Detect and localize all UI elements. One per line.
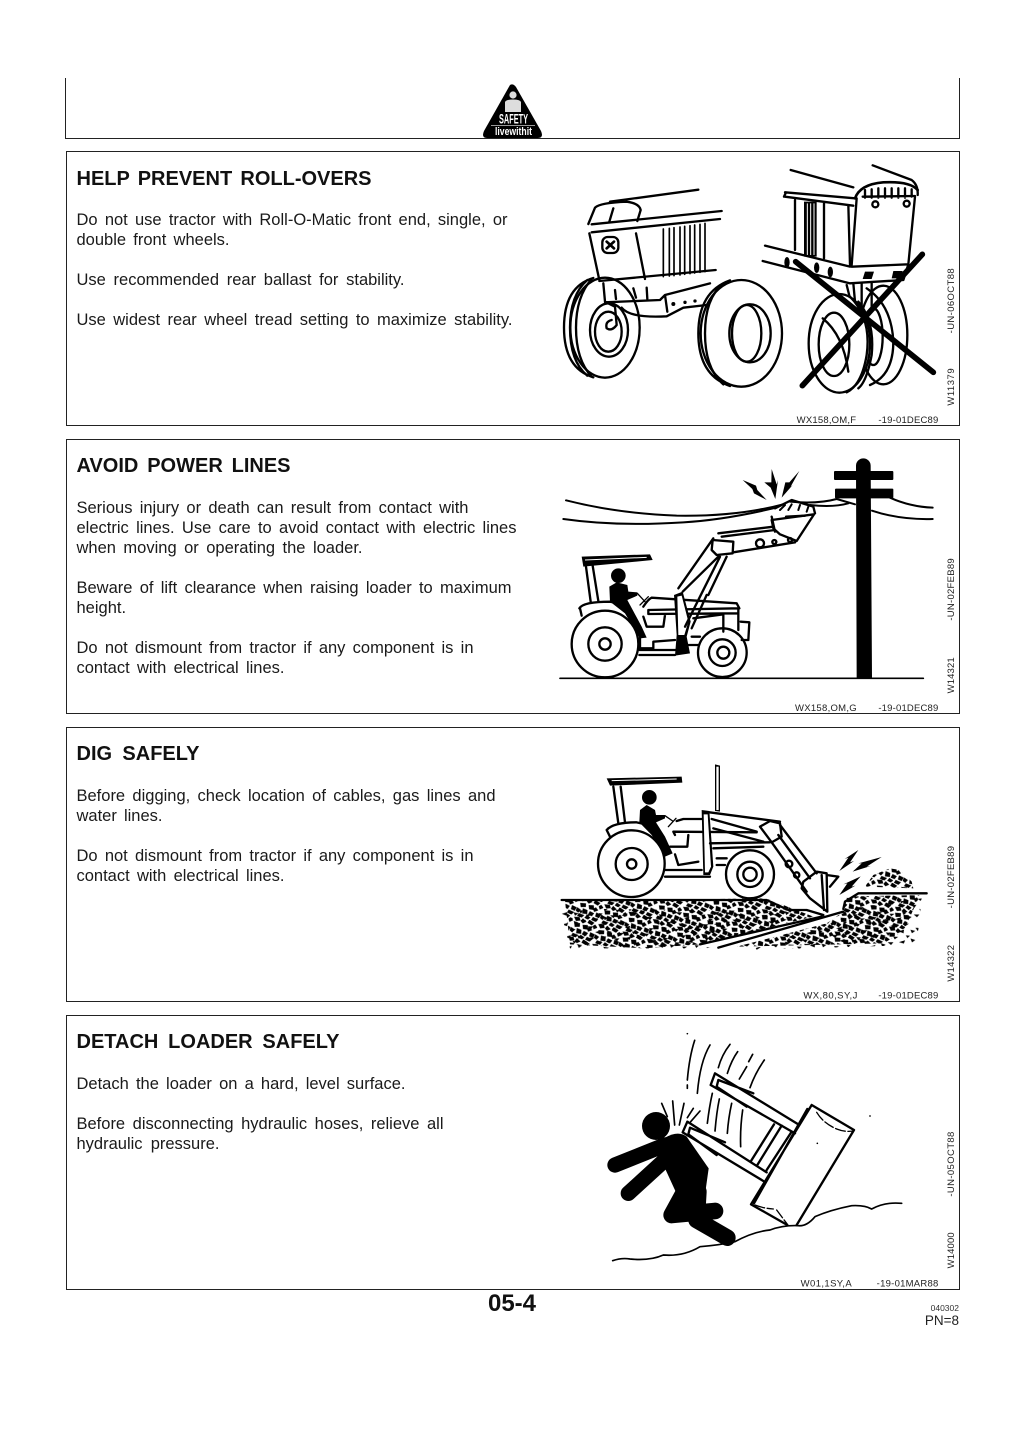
tractor with single front wheel, crossed out: [762, 165, 933, 393]
figure codes: W01,1SY,A: [800, 1279, 852, 1290]
text block: power line warnings: [76, 499, 516, 677]
text block: detach instructions: Before disconnecting hydraulic hoses, relieve all: [76, 1115, 444, 1133]
figure codes: -19-01MAR88: [876, 1279, 938, 1290]
page number: 05-4: [488, 1290, 536, 1317]
tractor with raised loader: [560, 500, 923, 678]
figure codes: W14321: [946, 657, 956, 693]
ground slope: [612, 1203, 901, 1261]
icon: safety live with it triangle: livewithit: [495, 126, 532, 138]
figure codes: -UN-02FEB89: [946, 846, 956, 908]
figure codes: -UN-02FEB89: [946, 558, 956, 621]
figure codes: [800, 1132, 956, 1290]
text block: power line warnings: height.: [76, 599, 126, 617]
text block: power line warnings: when moving or operating the loader.: [76, 539, 362, 557]
figure codes: -19-01DEC89: [878, 703, 938, 714]
figure codes: [796, 268, 956, 426]
tractor with lowered loader: [598, 764, 881, 912]
illustration: loader digging into buried lines: [560, 764, 956, 1002]
figure codes: W14000: [946, 1232, 956, 1268]
figure codes: [794, 558, 956, 714]
person: [614, 1112, 727, 1238]
figure codes: W11379: [946, 368, 956, 406]
text block: digging instructions: [76, 787, 496, 885]
utility pole and wires: [563, 458, 932, 678]
icon: safety live with it triangle: [483, 84, 542, 138]
impact and motion lines: [661, 1033, 870, 1147]
illustration: loader touching power lines: [559, 458, 956, 714]
text block: roll-over instructions: [76, 211, 512, 329]
figure codes: [803, 846, 956, 1002]
tractor with wide front: [564, 190, 782, 387]
heading: DETACH LOADER SAFELY: [76, 1031, 340, 1053]
panel: avoid power lines: [66, 439, 960, 714]
figure codes: WX158,OM,G: [794, 703, 856, 714]
figure codes: W14322: [946, 945, 956, 982]
text block: power line warnings: contact with electrical lines.: [76, 659, 284, 677]
figure codes: -UN-05OCT88: [946, 1132, 956, 1197]
text block: roll-over instructions: Use recommended rear ballast for stability.: [76, 271, 404, 289]
gravel ground: [560, 868, 926, 950]
panel: dig safely: [66, 727, 960, 1002]
panel: help prevent roll-overs: [66, 151, 960, 426]
figure codes: WX158,OM,F: [796, 415, 856, 426]
text block: digging instructions: Do not dismount from tractor if any component is in: [76, 847, 474, 865]
heading: AVOID POWER LINES: [76, 455, 290, 477]
falling loader: [682, 1073, 854, 1225]
figure codes: WX,80,SY,J: [803, 991, 857, 1002]
text block: digging instructions: Before digging, check location of cables, gas lines and: [76, 787, 496, 805]
heading: DIG SAFELY: [76, 743, 200, 765]
text block: detach instructions: [76, 1075, 444, 1153]
text block: roll-over instructions: double front wheels.: [76, 231, 230, 249]
text block: detach instructions: Detach the loader on a hard, level surface.: [76, 1075, 406, 1093]
top frame with safety triangle: [65, 78, 960, 139]
panel: detach loader safely: [66, 1015, 960, 1290]
top frame box: [65, 78, 960, 139]
illustration: two tractors, narrow front crossed out: [562, 164, 956, 426]
figure codes: -UN-06OCT88: [946, 268, 956, 333]
text block: detach instructions: hydraulic pressure.: [76, 1135, 220, 1153]
text block: roll-over instructions: Use widest rear wheel tread setting to maximize stability.: [76, 311, 512, 329]
text block: power line warnings: electric lines. Use care to avoid contact with electric lines: [76, 519, 516, 537]
text block: digging instructions: water lines.: [76, 807, 162, 825]
text block: roll-over instructions: Do not use tractor with Roll-O-Matic front end, single, or: [76, 211, 508, 229]
figure codes: -19-01DEC89: [878, 415, 938, 426]
heading: HELP PREVENT ROLL-OVERS: [76, 168, 372, 190]
text block: power line warnings: Do not dismount from tractor if any component is in: [76, 639, 474, 657]
part number: PN=8: [925, 1313, 959, 1328]
text block: power line warnings: Beware of lift clearance when raising loader to maximum: [76, 579, 512, 597]
document date code: 040302: [931, 1303, 959, 1313]
text block: digging instructions: contact with electrical lines.: [76, 867, 284, 885]
figure codes: -19-01DEC89: [878, 991, 938, 1002]
text block: power line warnings: Serious injury or death can result from contact with: [76, 499, 468, 517]
illustration: loader falling on person: [607, 1032, 956, 1290]
